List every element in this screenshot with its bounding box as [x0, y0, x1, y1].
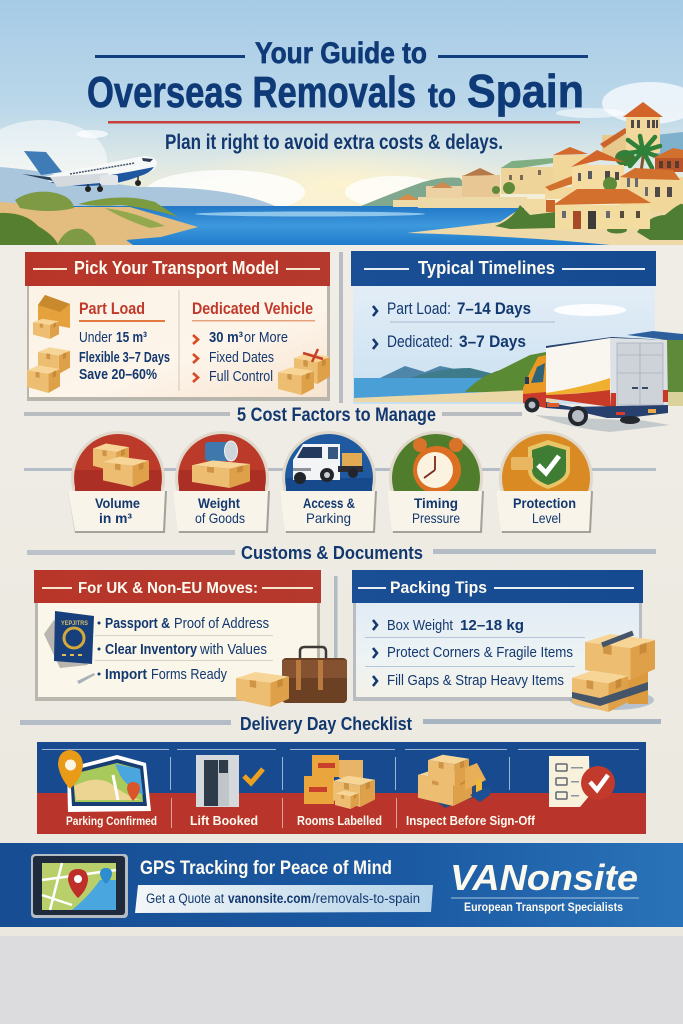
document list: Clear Inventory	[105, 642, 197, 658]
document list: Proof of Address	[174, 616, 269, 632]
left headland	[0, 192, 198, 245]
text rows: Part Load:	[387, 299, 451, 318]
part load column: Flexible 3–7 Days	[79, 350, 170, 366]
heading: For UK & Non-EU Moves:	[78, 580, 258, 597]
right shore	[407, 200, 683, 245]
panel: non-EU moves	[34, 570, 321, 701]
quote strip: vanonsite.com	[228, 891, 311, 906]
logo: VANonsite	[450, 857, 638, 898]
part load column: Under	[79, 330, 112, 346]
heading: customs	[27, 543, 656, 563]
part load column	[79, 299, 170, 383]
heading: Packing Tips	[390, 579, 487, 597]
cost factor: weight: Weight	[198, 495, 240, 511]
tips list: 12–18 kg	[460, 617, 524, 634]
icon: map and pin	[58, 750, 151, 812]
part load column: Save 20–60%	[79, 367, 157, 383]
sea	[0, 206, 683, 245]
checklist labels	[66, 813, 536, 828]
tips list: Protect Corners & Fragile Items	[387, 644, 573, 661]
text rows: 3–7 Days	[459, 332, 526, 351]
bushes	[495, 205, 555, 229]
clouds	[0, 82, 683, 214]
cost factor: weight: of Goods	[195, 510, 245, 526]
heading: cost factors	[24, 405, 522, 426]
checklist labels: Inspect Before Sign-Off	[406, 814, 536, 828]
quote strip	[135, 885, 433, 913]
cost factor: access: Parking	[306, 510, 351, 526]
cost factor: timing: Timing	[414, 495, 458, 511]
document list: with Values	[199, 642, 267, 658]
title: to	[428, 77, 456, 115]
divider	[339, 252, 343, 403]
spanish village	[393, 102, 683, 240]
gps text: GPS Tracking for Peace of Mind	[140, 858, 392, 879]
panel: transport model	[25, 252, 330, 401]
panel: packing tips	[352, 570, 643, 701]
logo: European Transport Specialists	[464, 902, 623, 914]
distant hills	[0, 167, 275, 206]
heading: cost factors: 5 Cost Factors to Manage	[237, 405, 436, 426]
title	[87, 37, 588, 124]
subtitle: Plan it right to avoid extra costs & delays.	[165, 131, 503, 154]
panel: delivery checklist	[37, 742, 646, 834]
dedicated vehicle column: 30 m³	[209, 330, 243, 346]
document list: Forms Ready	[151, 667, 228, 683]
icon: inspect boxes	[416, 755, 490, 808]
tower	[602, 135, 627, 157]
title: Overseas Removals	[87, 68, 416, 117]
cost factor: volume: in m³	[99, 510, 132, 526]
front house	[555, 205, 650, 229]
icon: box and briefcase	[236, 647, 347, 707]
dedicated vehicle column: Full Control	[209, 369, 273, 385]
icon: passport	[44, 611, 94, 668]
checklist labels: Parking Confirmed	[66, 814, 157, 828]
cost factor: protection: Level	[532, 510, 561, 526]
icon: pen	[77, 673, 95, 684]
part load column: 15 m³	[116, 330, 147, 346]
mid houses	[553, 155, 588, 185]
text rows: 7–14 Days	[457, 299, 531, 318]
heading: checklist	[20, 714, 661, 734]
heading: Typical Timelines	[418, 258, 555, 278]
icon: labelled boxes	[304, 755, 375, 809]
icon: clipboard	[549, 756, 615, 807]
tips list	[365, 617, 585, 689]
heading: checklist: Delivery Day Checklist	[240, 714, 412, 734]
tips list: Box Weight	[387, 617, 454, 634]
text rows	[373, 299, 555, 351]
icon: airplane	[22, 151, 157, 192]
dedicated vehicle column	[192, 299, 315, 385]
palm tree	[615, 136, 661, 172]
cost factor: timing	[387, 431, 484, 533]
cost factor: access: Access &	[303, 495, 355, 511]
scene: coast	[354, 352, 560, 402]
title: Your Guide to	[255, 37, 427, 70]
document list: Import	[105, 667, 147, 683]
icon: gps tablet	[31, 854, 128, 918]
cost factor: volume: Volume	[95, 495, 140, 511]
icon: strapped boxes	[570, 633, 655, 712]
icon: removal truck	[523, 331, 683, 432]
dedicated vehicle column: Dedicated Vehicle	[192, 299, 313, 318]
logo	[450, 857, 639, 914]
quote strip: /removals-to-spain	[312, 891, 420, 906]
quote strip: Get a Quote at	[146, 891, 224, 906]
cost factor: access	[280, 431, 377, 533]
icon: part load boxes	[27, 295, 70, 393]
title: Spain	[467, 65, 584, 117]
header scene	[0, 0, 683, 245]
text rows: Dedicated:	[387, 332, 453, 351]
document list	[95, 616, 273, 683]
tips list: Fill Gaps & Strap Heavy Items	[387, 672, 564, 689]
footer band	[0, 843, 683, 927]
panel: typical timelines	[351, 251, 656, 404]
far houses	[393, 200, 419, 207]
heading: Pick Your Transport Model	[74, 258, 279, 278]
heading: customs: Customs & Documents	[241, 543, 423, 563]
cost factor: protection	[496, 431, 593, 533]
icon: gift boxes	[278, 349, 330, 395]
band line	[24, 468, 656, 471]
checklist labels: Lift Booked	[190, 813, 258, 828]
document list: Passport &	[105, 616, 170, 632]
part load column: Part Load	[79, 299, 145, 318]
dedicated vehicle column: or More	[244, 330, 288, 346]
checklist labels: Rooms Labelled	[297, 814, 382, 828]
dedicated vehicle column: Fixed Dates	[209, 350, 274, 366]
icon: lift	[196, 755, 263, 807]
icon: passport: YEPJITRS	[61, 621, 88, 627]
cost factor: timing: Pressure	[412, 510, 460, 526]
cost factor: weight	[173, 431, 270, 533]
cost factor: protection: Protection	[513, 495, 576, 511]
divider	[334, 576, 338, 696]
cost factor: volume	[68, 431, 167, 533]
empty lower band	[0, 936, 683, 1024]
